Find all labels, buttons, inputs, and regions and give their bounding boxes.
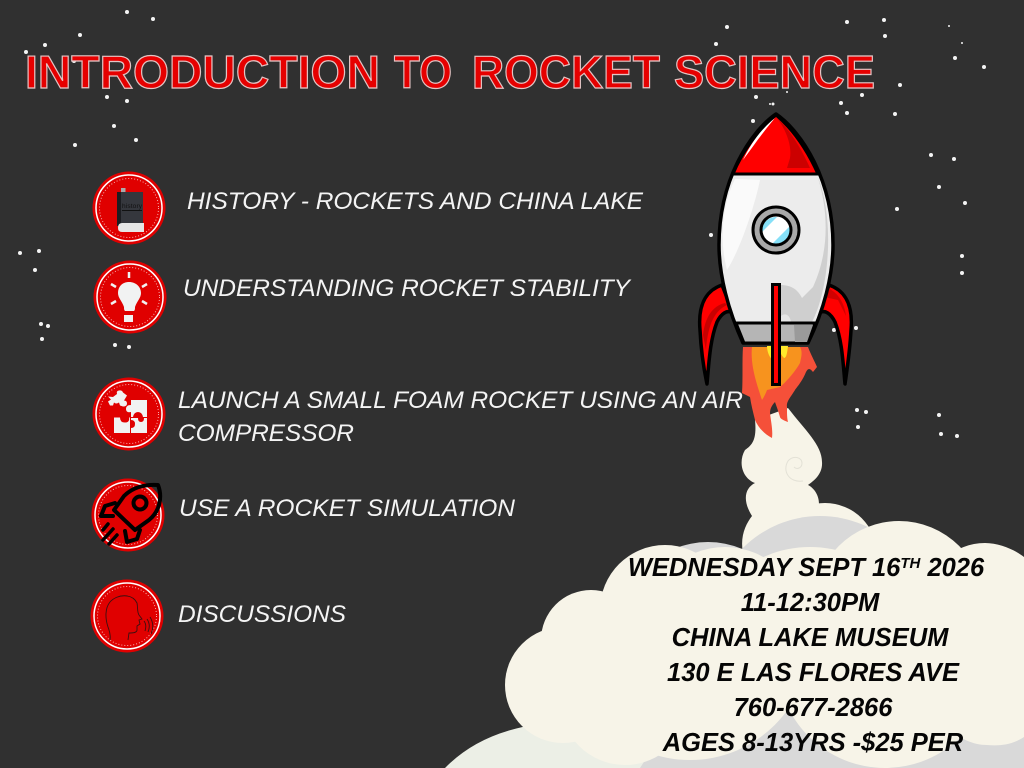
nose cone [733,115,818,174]
text: simulation: USE A ROCKET SIMULATION [179,495,515,522]
text: stability: UNDERSTANDING ROCKET STABILITY [183,275,632,302]
cloud: main cloud [505,521,1024,768]
icon: history book [92,172,166,244]
text: event details: CHINA LAKE MUSEUM [672,624,949,652]
smoke trail [742,408,877,607]
text: event details: AGES 8-13YRS -$25 PER [662,729,964,757]
title: SCIENCE [674,46,875,98]
icon: history book: history [122,203,143,210]
rocket [700,114,851,438]
text: event details: 760-677-2866 [734,694,893,722]
text: event details: TH [900,555,922,572]
text: event details: 2026 [920,554,985,582]
centre fin [772,284,780,384]
body [719,114,833,343]
text: history: HISTORY - ROCKETS AND CHINA LAKE [187,188,644,215]
title: TO [394,46,452,98]
text: discussions: DISCUSSIONS [178,601,347,628]
icon: light bulb [94,260,166,334]
text: event details: 130 E LAS FLORES AVE [667,659,960,687]
text: event details: 11-12:30PM [741,589,880,617]
title: ROCKET [472,46,660,98]
porthole [753,207,799,253]
icon: speaking head [90,580,164,652]
bottom band [736,323,815,343]
icon: puzzle [92,378,166,450]
icon: rocket outline [92,478,164,552]
title: INTRODUCTION [25,46,380,98]
cloud: back clouds [445,516,1024,768]
flame [742,346,817,438]
text: launch: LAUNCH A SMALL FOAM ROCKET USING AN AIR [178,387,743,414]
fins [700,285,851,384]
title [25,46,875,98]
text: event details: WEDNESDAY SEPT 16 [628,554,900,582]
text: compressor: COMPRESSOR [178,420,354,447]
text: event details [628,554,985,757]
